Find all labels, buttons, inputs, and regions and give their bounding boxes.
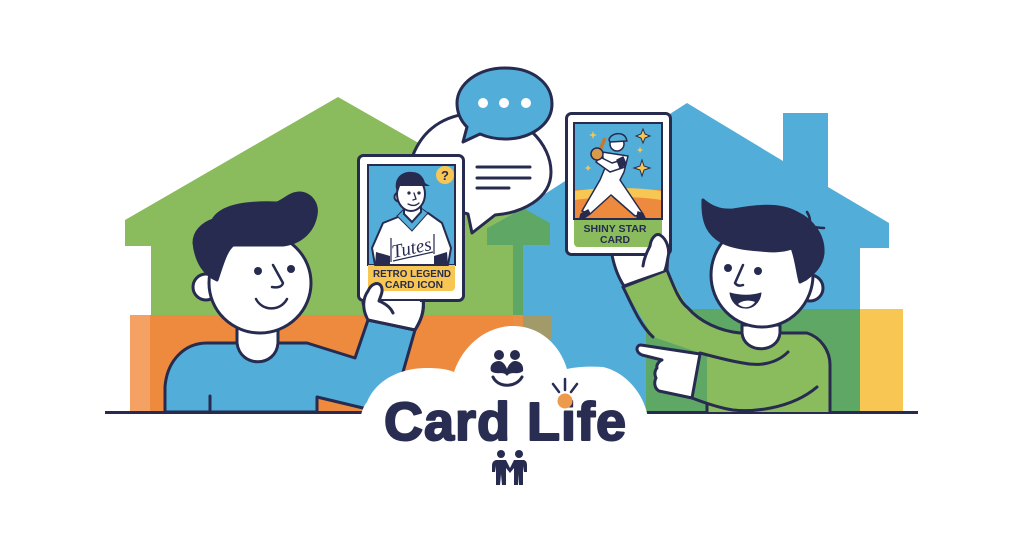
- batter: [580, 134, 645, 218]
- icon: smiling pair: [491, 350, 523, 385]
- right hand thumb: [625, 235, 669, 282]
- right person eyes: [724, 264, 762, 275]
- question badge: ?: [441, 168, 449, 183]
- right person head: [711, 223, 813, 327]
- question badge: [436, 166, 454, 184]
- card label: [368, 265, 455, 291]
- icon: sun dot: [553, 379, 577, 408]
- right person upper hand: [612, 250, 668, 286]
- logo wordmark: Card Life: [384, 392, 626, 452]
- retro legend card: CARD ICON: [385, 279, 443, 291]
- blue house: [523, 103, 889, 412]
- sparkles: [585, 129, 650, 176]
- player jersey: [372, 213, 451, 265]
- left person nose: [272, 265, 283, 287]
- logo cloud: [359, 326, 650, 485]
- left person body and arm: [165, 320, 415, 412]
- overlap roof and stem: [487, 208, 550, 315]
- typing dots: [478, 98, 531, 108]
- right person nose: [735, 265, 743, 286]
- left person ear: [193, 274, 219, 300]
- right person hair tufts: [807, 212, 824, 228]
- left person neck: [237, 325, 278, 362]
- player face: [408, 192, 420, 205]
- left person: [165, 193, 415, 412]
- message lines: [477, 167, 530, 188]
- white speech bubble: [413, 113, 551, 233]
- right person: [612, 200, 830, 412]
- player cap: [396, 172, 430, 192]
- retro legend card: [358, 156, 464, 300]
- right person neck: [742, 325, 780, 349]
- logo: [384, 350, 626, 485]
- left person smile: [256, 299, 287, 308]
- card label text: RETRO LEGEND: [373, 268, 451, 280]
- player neck and head: [394, 177, 425, 222]
- player collar: [397, 208, 428, 231]
- card label text: SHINY STAR: [584, 223, 647, 235]
- right person pointing hand: [637, 345, 700, 398]
- ground line: [105, 411, 918, 414]
- icon: two people holding hands: [492, 450, 527, 485]
- green and yellow house wall: [646, 309, 903, 412]
- green house: [125, 97, 550, 316]
- shiny star card: CARD: [600, 234, 630, 246]
- left person eyes: [254, 265, 295, 275]
- jersey script: Tutes: [390, 234, 433, 263]
- orange house wall: [130, 315, 551, 412]
- pitch ground: [575, 188, 661, 218]
- shiny star card: [566, 114, 670, 254]
- left hand thumb: [364, 284, 423, 330]
- left person hair: [194, 193, 316, 280]
- right person raised arm: [623, 270, 788, 364]
- right person forearm: [700, 352, 788, 364]
- right person torso: [707, 330, 830, 412]
- left person head: [209, 233, 311, 333]
- left hand behind card: [363, 290, 423, 330]
- player sleeves: [375, 252, 448, 265]
- right person ear: [797, 275, 823, 301]
- right person mouth: [730, 293, 761, 308]
- card label: [574, 220, 662, 247]
- right person hair: [703, 200, 823, 282]
- blue speech bubble: [457, 68, 552, 142]
